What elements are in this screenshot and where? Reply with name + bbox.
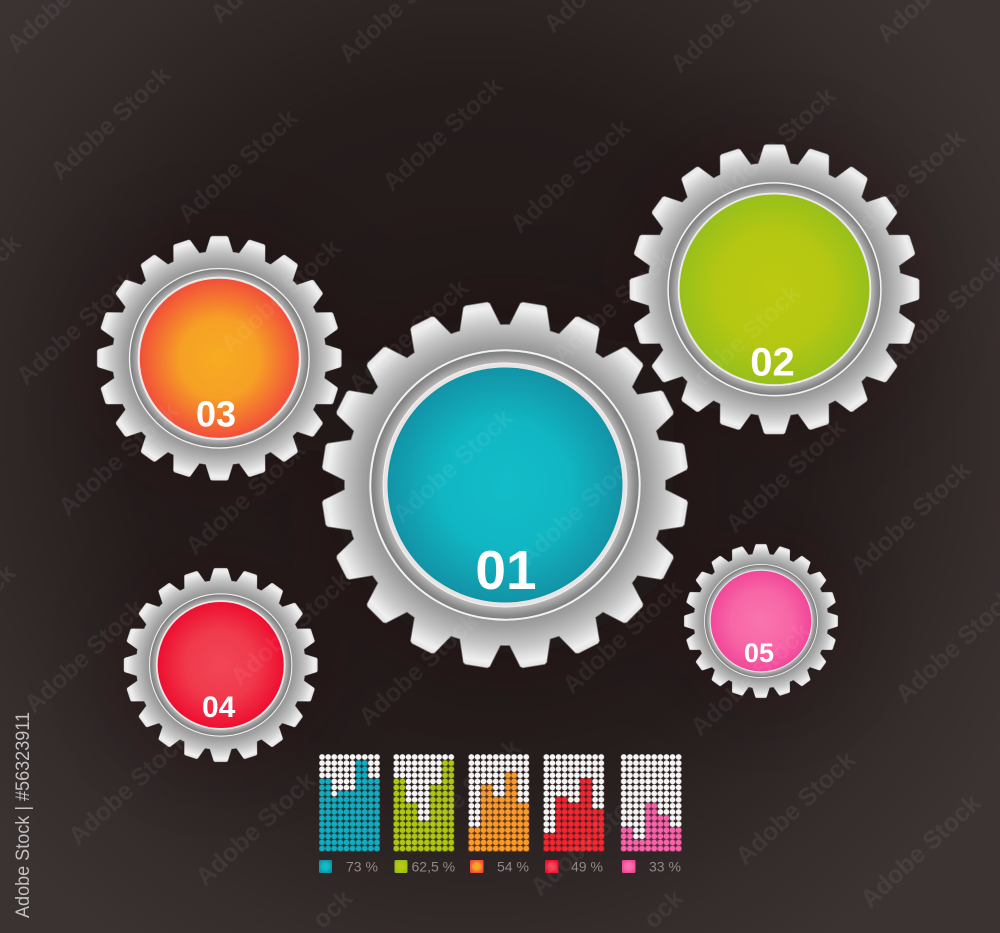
watermark pattern: Adobe Stock — [855, 789, 986, 913]
watermark pattern: Adobe Stock — [377, 72, 508, 196]
legend: 54 %: 54 % — [497, 858, 529, 874]
gear 02 — [630, 145, 919, 434]
gear 05 — [684, 544, 838, 698]
watermark pattern: ock — [307, 884, 358, 933]
watermark pattern: Adobe Stock — [19, 594, 150, 718]
watermark pattern: Adobe Stock — [685, 617, 816, 741]
watermark pattern: ock — [638, 884, 689, 933]
watermark pattern: Adobe Stock — [710, 82, 841, 206]
number 03: 03 — [196, 394, 236, 434]
watermark pattern: Adobe Stock — [840, 124, 971, 248]
dot chart: 73 % — [319, 754, 380, 852]
legend: 54 % — [470, 858, 529, 874]
legend: 62,5 %: 62,5 % — [412, 858, 455, 874]
watermark pattern: Adobe Stock — [505, 114, 636, 238]
legend: 73 % — [319, 858, 378, 874]
watermark pattern: Adobe Stock — [387, 404, 518, 528]
watermark pattern: Adobe Stock — [547, 244, 678, 368]
legend: 73 %: 73 % — [346, 858, 378, 874]
dot chart: 49 % — [543, 754, 604, 852]
watermark pattern: Adobe Stock — [215, 234, 346, 358]
legend: 49 % — [545, 858, 603, 874]
watermark pattern: Adobe Stock — [225, 567, 356, 691]
dot chart: 62,5 % — [393, 754, 454, 852]
watermark pattern: Adobe Stock — [513, 447, 644, 571]
number 04: 04 — [202, 691, 236, 724]
watermark pattern: Adobe Stock — [190, 767, 321, 891]
dot chart: 33 % — [621, 754, 682, 852]
number 02: 02 — [750, 341, 795, 385]
watermark pattern: Adobe Stock — [343, 274, 474, 398]
watermark pattern: Adobe Stock — [11, 266, 142, 390]
dot chart: 54 % — [468, 754, 529, 852]
number 05: 05 — [744, 638, 774, 668]
stock id label: Adobe Stock | #56323911 — [13, 712, 34, 918]
legend: 33 %: 33 % — [649, 858, 681, 874]
gear 01 — [296, 276, 714, 694]
watermark pattern: Adobe Stock — [172, 104, 303, 228]
watermark pattern: Adobe Stock — [675, 279, 806, 403]
watermark pattern: Adobe Stock — [557, 575, 688, 699]
gear shadows — [109, 159, 905, 750]
watermark pattern: Adobe Stock — [45, 61, 176, 185]
gear 04 — [124, 568, 317, 762]
watermark pattern: Adobe Stock — [845, 456, 976, 580]
legend: 49 %: 49 % — [571, 858, 603, 874]
watermark pattern: Adobe Stock — [353, 607, 484, 731]
watermark pattern: Adobe Stock — [53, 397, 184, 521]
legend: 33 % — [622, 858, 681, 874]
watermark pattern: Adobe Stock — [730, 746, 861, 870]
watermark pattern: Adobe Stock — [63, 726, 194, 850]
watermark pattern: Adobe Stock — [395, 734, 526, 858]
watermark pattern: Adobe Stock — [720, 414, 851, 538]
watermark pattern: Adobe Stock — [180, 436, 311, 560]
gear 03 — [97, 236, 341, 480]
watermark pattern: Adobe Stock — [525, 777, 656, 901]
number 01: 01 — [475, 539, 537, 601]
